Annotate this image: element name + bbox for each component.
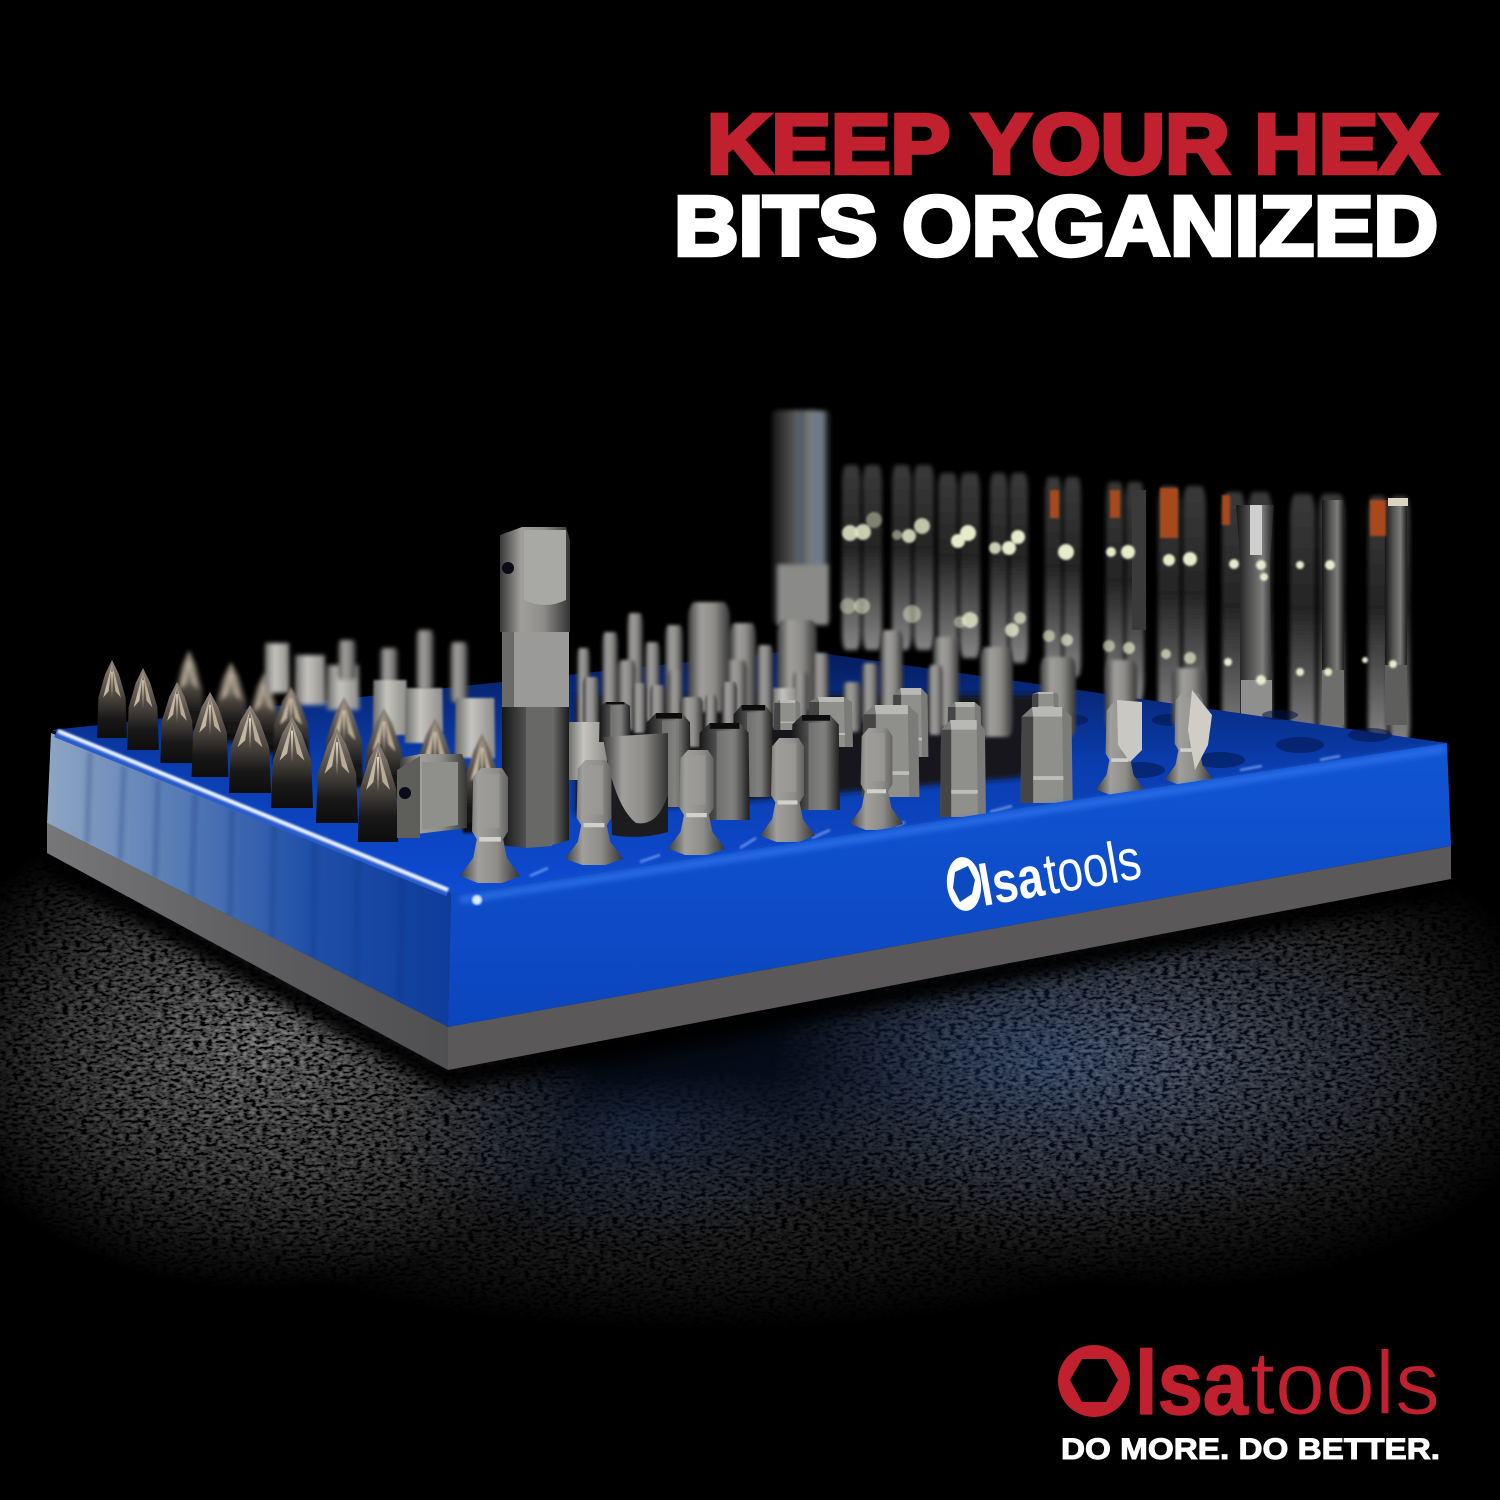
large square drive adapter [500,527,570,848]
orange reflections [1050,488,1386,538]
tray logo wordmark [974,826,1146,919]
tray front lip [460,749,1445,900]
bokeh highlights [840,512,1397,685]
wordmark tools: tools [1250,1334,1440,1434]
tray shadow [47,860,1451,1078]
tray top surface with holes [52,650,1447,895]
tray front face [448,743,1451,1027]
tray logo [944,826,1146,919]
brand logo [1058,1334,1440,1434]
title line: keep your hex: KEEP YOUR HEX [707,97,1438,191]
flared front bits [460,690,1213,883]
tray surface glints [530,756,1340,876]
socket adapter, tall back bit [772,410,830,625]
title line: bits organized: BITS ORGANIZED [674,179,1438,273]
textured mat surface [0,872,1500,1314]
small square adapter bit [397,754,467,838]
wordmark lsa: lsa [1135,1334,1249,1434]
tray logo wordmark: tools [1039,826,1146,907]
tray logo wordmark: lsa [974,844,1049,919]
sharper bits at right of back row [1132,490,1408,770]
tall back row of bits [842,465,1410,749]
front row of phillips bits [97,660,398,842]
tray logo hexagon O [944,855,984,913]
hex bits, middle rows [568,688,1059,820]
tray left rim highlight [56,731,482,905]
tray left side face [47,733,451,1027]
tagline: DO MORE. DO BETTER. [1061,1433,1440,1466]
mid clutter of small bits [577,602,1206,737]
title [674,97,1438,273]
sharper middle cylinders [583,677,796,747]
hexagon O [1058,1345,1130,1417]
back row of phillips and flat bits [174,630,468,753]
tray grey base, left [47,823,448,1070]
dark backdrop behind mid clutter [575,695,1050,815]
flat head bits [273,680,501,833]
tray grey base, front [448,846,1451,1070]
slotted blade bit [603,733,668,837]
